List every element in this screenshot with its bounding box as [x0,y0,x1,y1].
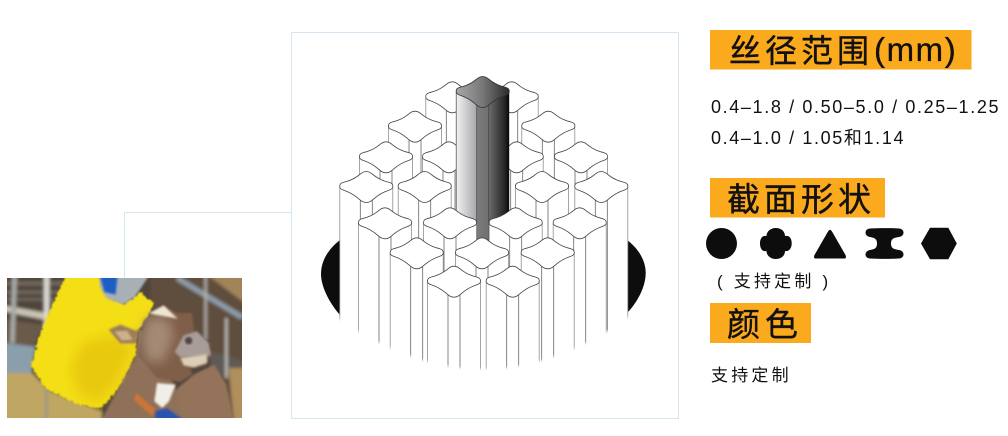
icon: I-beam [866,228,904,259]
heading: wire diameter range: (mm) [874,31,957,68]
ear [109,325,138,343]
filament bundle illustration [340,76,628,430]
blue tag [155,408,183,420]
text: customizable note: ( 支持定制 ) [717,272,831,291]
icon: hexagon [921,228,957,259]
cow neck [103,328,176,418]
cow head [138,306,211,382]
icon: triangle [814,230,846,258]
text: diameter values [711,97,1000,148]
cheek highlight [142,318,174,361]
icon: circle [706,228,737,259]
icon: clover [760,228,792,259]
black core: left [321,240,340,315]
second cow body [175,364,233,418]
connector line [124,212,292,278]
heading: color: 颜色 [727,306,803,343]
photo: cow with yellow brush [4,275,247,421]
icons: cross-section shapes [706,228,957,259]
collar [134,393,155,416]
heading: color [710,303,811,343]
brush shading [70,335,134,403]
highlighted dark filament [456,76,509,262]
text: diameter values: 0.4–1.8 / 0.50–5.0 / 0.25–1.25 [711,97,1000,117]
heading: wire diameter range: 丝径范围 [729,33,873,69]
text: color customizable: 支持定制 [711,366,792,385]
illustration frame [292,32,678,418]
muzzle [175,331,211,357]
heading: wire diameter range [710,30,972,70]
yellow brush [30,275,154,409]
text: diameter values: 0.4–1.0 / 1.05和1.14 [711,128,905,148]
forehead patch [149,305,178,319]
heading: cross-section shape: 截面形状 [727,181,875,218]
brush holder [99,275,150,305]
white chest [154,383,176,408]
black core: right [627,240,646,313]
